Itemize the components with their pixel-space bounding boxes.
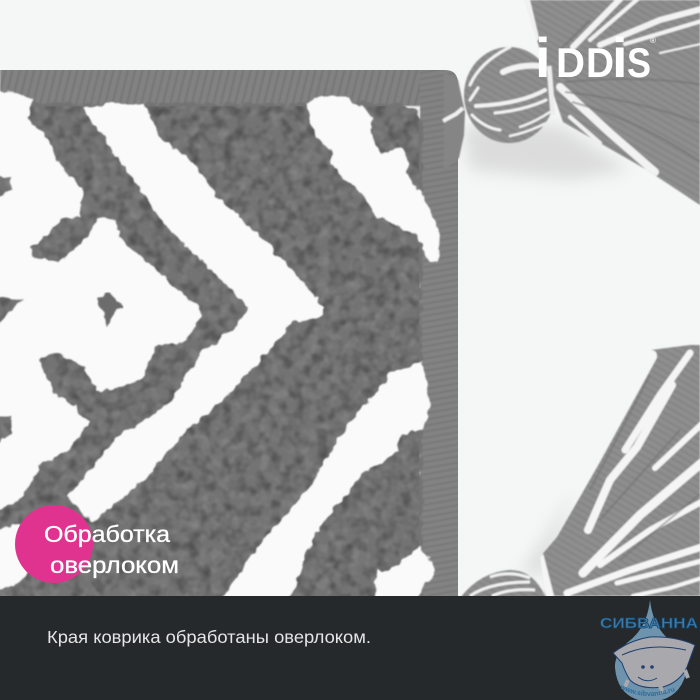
dark footer band — [0, 596, 700, 700]
bathtub — [613, 637, 695, 693]
iddis logo: S — [627, 39, 651, 86]
knot to rug tie — [443, 72, 465, 170]
tassel knot — [464, 47, 554, 143]
lower-right band — [222, 362, 430, 600]
bottom-right tassel — [460, 340, 700, 600]
iddis logo: ® — [650, 36, 656, 45]
central diamond and left lattice — [0, 90, 203, 515]
water drop — [615, 600, 687, 700]
footer description: Края коврика обработаны оверлоком. — [47, 627, 371, 647]
lower-left fragment — [0, 523, 28, 590]
badge: pink circle — [15, 505, 93, 583]
shadows under tassels — [462, 125, 630, 575]
iddis logo: D — [556, 39, 585, 86]
tassel strands — [535, 340, 700, 600]
chevron band — [67, 103, 325, 523]
iddis logo: i — [612, 26, 628, 89]
white woven pattern — [0, 90, 440, 600]
badge heading — [44, 521, 179, 578]
website: www.sibvanna.ru — [620, 685, 675, 696]
bottom-right fragment — [373, 547, 437, 600]
lower knot — [460, 570, 546, 598]
rug with overlocked edge — [0, 68, 460, 600]
brand name: СИБВАННА — [600, 615, 698, 632]
overlock binding — [0, 68, 460, 598]
iddis logo: D — [586, 39, 614, 86]
iddis logo: i — [535, 26, 551, 89]
badge heading: оверлоком — [50, 552, 179, 578]
iddis logo — [535, 26, 656, 89]
upper-right band — [307, 97, 440, 263]
badge heading: Обработка — [44, 521, 170, 547]
motif centre dot — [97, 294, 122, 328]
rug pile — [0, 103, 422, 600]
sibvanna logo — [600, 600, 698, 700]
tassel strands — [520, 0, 700, 210]
top-right tassel — [443, 0, 700, 210]
pile texture — [0, 106, 419, 600]
